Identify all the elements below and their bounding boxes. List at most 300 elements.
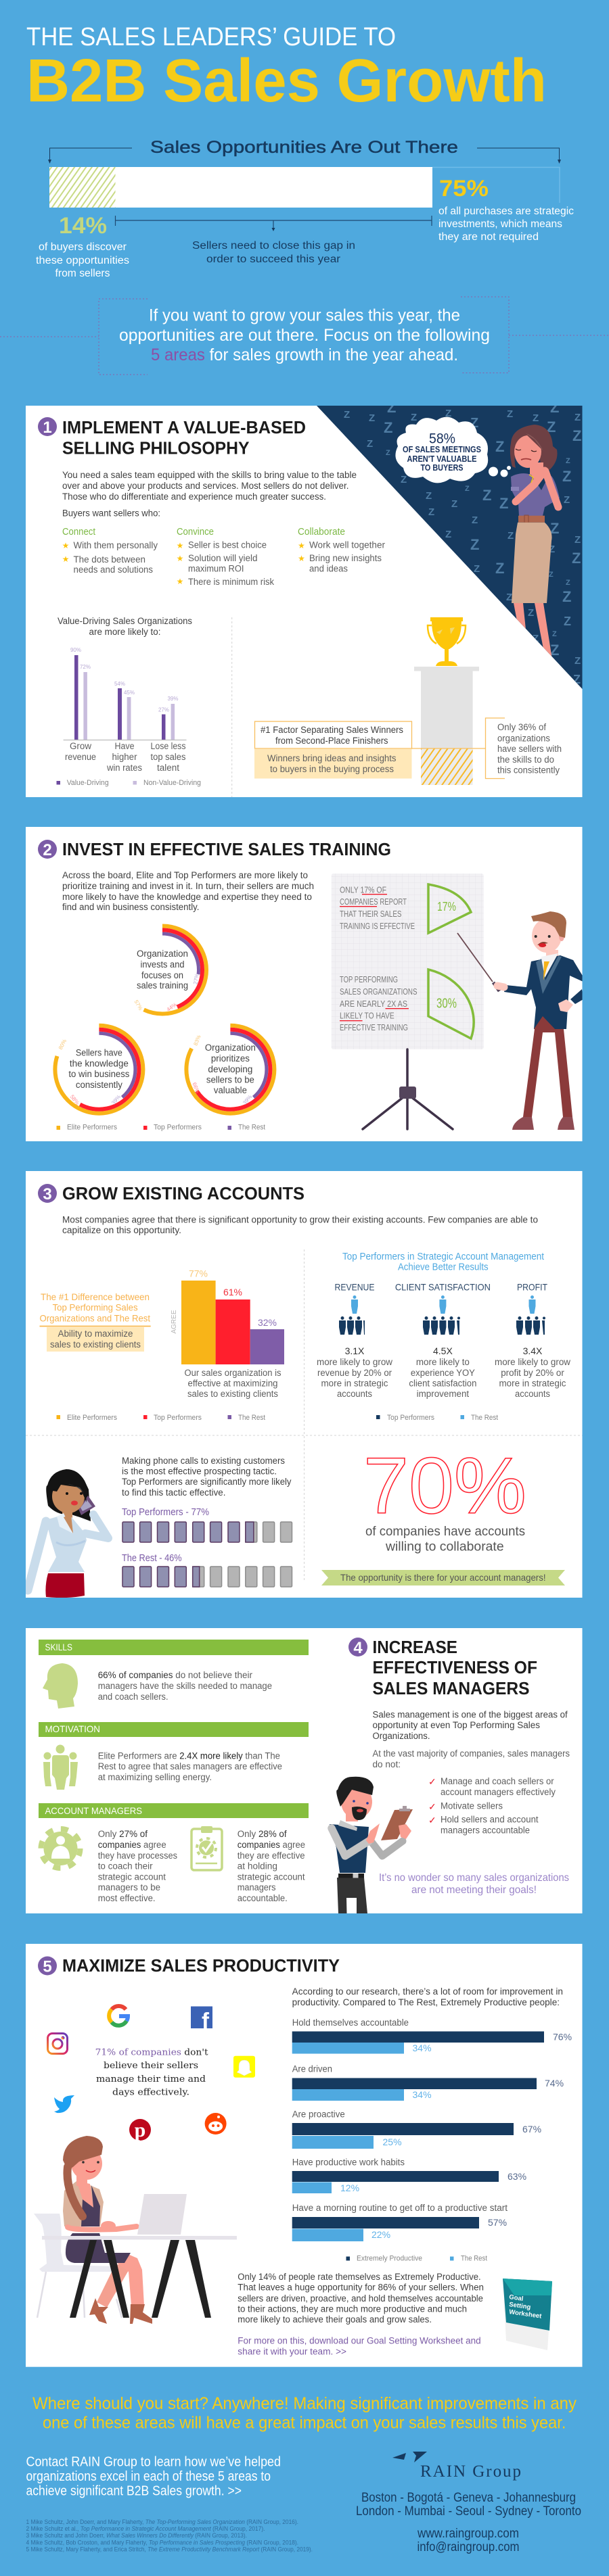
callout: number one factor: to buyers in the buying process	[270, 764, 394, 774]
z pattern: Z	[550, 520, 559, 537]
z pattern: Z	[472, 515, 478, 526]
column: client satisfaction	[395, 1282, 491, 1399]
text: contact details: info@raingroup.com	[417, 2540, 520, 2554]
list: managers do not: ✓	[428, 1815, 436, 1826]
z pattern: Z	[566, 579, 570, 587]
chart: sellers knowledge donut: 80%	[58, 1039, 68, 1051]
column: profit: more in strategic	[499, 1378, 566, 1389]
text: contact rain group	[26, 2454, 281, 2499]
icon: twitter	[54, 2095, 74, 2113]
callout: number one factor	[254, 721, 411, 779]
callout: only 36 percent: Only 36% of	[497, 722, 546, 732]
text: sales management intro: Organizations.	[372, 1731, 430, 1741]
text: intro: prioritize training and invest in it. In turn, their sellers are much	[62, 881, 314, 891]
callout: 58 percent thought bubble	[395, 417, 511, 483]
callout: only 36 percent	[411, 718, 562, 779]
callout: number one factor: Winners bring ideas and insights	[267, 753, 397, 763]
text: only 17 percent	[340, 884, 415, 931]
chart: prioritizes developing donut: Organization	[205, 1043, 256, 1053]
icon: presenter	[457, 911, 583, 1130]
z pattern: Z	[550, 642, 559, 659]
callout: number one factor: #1 Factor Separating Sales Winners	[261, 725, 403, 735]
text: 28 percent: accountable.	[238, 1893, 288, 1903]
logo: rain group	[392, 2452, 521, 2481]
callout: 71 percent of companies	[95, 2047, 208, 2097]
text: 75 percent caption	[438, 206, 574, 243]
icon: clipboard	[191, 1826, 222, 1870]
chart: value-driving bars: higher	[112, 752, 137, 762]
z pattern: Z	[562, 588, 571, 605]
legend: performers: The Rest	[238, 1124, 265, 1132]
callout: where should you start: one of these areas will have a great impact on your sales results this year.	[43, 2414, 566, 2433]
text: intro: You need a sales team equipped with the skills to bring value to the table	[62, 470, 357, 480]
chart: morning routine bars	[292, 2203, 508, 2241]
text: only 17 percent: ONLY 17% OF	[340, 884, 386, 895]
chart: organization invests donut: Organization	[137, 949, 188, 959]
chart: maximizing sales bars: 77%	[189, 1268, 208, 1279]
chart: value-driving bars: revenue	[65, 752, 96, 762]
text: top performing: ARE NEARLY 2X AS	[340, 999, 407, 1009]
text: top performing: SALES ORGANIZATIONS	[340, 986, 418, 997]
chart: accountable bars: 76%	[553, 2031, 572, 2042]
text: only 17 percent: COMPANIES REPORT	[340, 897, 407, 907]
chart: maximizing sales bars: effective at maximizing	[188, 1378, 277, 1389]
icon: facebook: f	[202, 2008, 210, 2033]
callout: 71 percent of companies: 71% of companies don't	[95, 2047, 208, 2058]
dark sleepy triangle	[317, 406, 582, 689]
text: intro: over and above your products and services. Most sellers do not deliver.	[62, 481, 349, 491]
z pattern: Z	[552, 630, 557, 638]
list: managers do not: managers accountable	[441, 1826, 530, 1835]
link: goal setting worksheet: share it with your team. >>	[238, 2346, 346, 2357]
heading: section 5: MAXIMIZE SALES PRODUCTIVITY	[62, 1955, 340, 1976]
icon: worksheet book: Worksheet	[509, 2308, 543, 2320]
z pattern: Z	[387, 399, 396, 416]
heading: sales opportunities: Sales Opportunities Are Out There	[150, 138, 458, 157]
icon: number 5	[38, 1957, 57, 1976]
list: collaborate: ★	[298, 554, 305, 563]
callout: only 36 percent: the skills to do	[497, 755, 554, 765]
chart: maximizing sales bars: 61%	[223, 1287, 242, 1297]
chart: top performers phones 77 percent: Top Performers - 77%	[122, 1507, 209, 1518]
chart: 17 percent sector: 17%	[437, 900, 456, 913]
list: collaborate: Work well together	[309, 540, 386, 550]
icon: woman on phone	[28, 1469, 108, 1598]
z pattern: Z	[506, 592, 512, 603]
chart: proactive bars: Are proactive	[292, 2109, 345, 2119]
chart: sellers knowledge donut: the knowledge	[70, 1059, 129, 1068]
text: close the gap: order to succeed this year	[206, 254, 340, 265]
text: productivity intro: According to our research, there’s a lot of room for improvement in	[292, 1986, 563, 1997]
chart: maximizing sales bars: sales to existing clients	[187, 1389, 278, 1399]
column: revenue: more in strategic	[321, 1378, 388, 1389]
chart: sellers knowledge donut: 58%	[69, 1094, 81, 1106]
text: 27 percent: Only 27% of	[98, 1829, 148, 1839]
z pattern: Z	[562, 468, 571, 485]
list: managers do not: Manage and coach sellers or	[441, 1776, 554, 1786]
list: collaborate	[298, 527, 386, 573]
text: office locations	[356, 2491, 581, 2519]
legend: extremely productive: The Rest	[461, 2254, 487, 2262]
arrow: gap bracket	[115, 216, 432, 231]
text: intro	[62, 470, 357, 518]
chart: value-driving bars: Have	[115, 741, 134, 751]
legend: extremely productive: Extremely Productive	[357, 2254, 422, 2262]
text: office locations: London - Mumbai - Seoul - Sydney - Toronto	[356, 2504, 581, 2519]
chart: sellers knowledge donut: Sellers have	[76, 1048, 122, 1057]
list: connect: needs and solutions	[73, 565, 153, 575]
heading: section 4: SALES MANAGERS	[372, 1678, 529, 1698]
z pattern	[344, 399, 581, 686]
legend: performers: Elite Performers	[67, 1414, 117, 1422]
icon: trophy	[428, 617, 466, 666]
z pattern: Z	[533, 633, 539, 644]
text: 28 percent: they are effective	[238, 1851, 305, 1861]
z pattern: Z	[573, 673, 581, 686]
chart: organization invests donut: focuses on	[141, 970, 183, 980]
list: connect: ★	[62, 554, 69, 564]
panel: 1 value-based selling	[26, 399, 582, 797]
z pattern: Z	[574, 412, 581, 423]
chart: sellers knowledge donut: to win business	[68, 1069, 130, 1079]
callout: number one difference: Top Performing Sales	[53, 1302, 138, 1313]
chart: value-driving bars: are more likely to:	[89, 627, 161, 637]
chart: organization invests donut: 44%	[166, 1001, 178, 1013]
list: collaborate: Collaborate	[298, 527, 345, 538]
icon: worksheet book: Setting	[509, 2301, 531, 2311]
z pattern: Z	[474, 563, 480, 575]
chart: prioritizes developing donut: 66%	[191, 1082, 200, 1094]
column: client satisfaction: more likely to	[416, 1357, 470, 1367]
z pattern: Z	[564, 615, 571, 628]
z pattern: Z	[549, 544, 555, 555]
z pattern: Z	[499, 495, 508, 512]
chart: work habits bars: 12%	[340, 2183, 359, 2193]
z pattern: Z	[386, 449, 390, 457]
text: intro: Those who do differentiate and experience much greater success.	[62, 492, 326, 502]
heading: strategic account management: Top Performers in Strategic Account Management	[342, 1251, 544, 1262]
list: managers do not: account managers effectively	[441, 1787, 556, 1797]
chart: organization invests donut: 27%	[192, 973, 200, 985]
legend: performers	[57, 1414, 265, 1422]
text: sales management intro: do not:	[372, 1759, 401, 1769]
panel: 5 sales productivity	[26, 1944, 582, 2367]
panel: sales opportunities gap	[36, 138, 574, 279]
text: intro	[62, 1214, 538, 1235]
text: contact rain group: Contact RAIN Group to learn how we’ve helped	[26, 2454, 281, 2469]
z pattern: Z	[445, 529, 451, 540]
chart: the rest phones 46 percent	[122, 1553, 292, 1587]
heading: section 1	[62, 417, 306, 458]
text: sales management intro: Sales management is one of the biggest areas of	[372, 1709, 568, 1720]
text: 75 percent caption: of all purchases are strategic	[438, 206, 574, 217]
text: office locations: Boston - Bogotá - Geneva - Johannesburg	[361, 2491, 576, 2505]
callout: where should you start	[32, 2394, 577, 2433]
list: connect: Connect	[62, 527, 95, 538]
section: skills	[39, 1640, 309, 1709]
text: productivity intro	[292, 1986, 563, 2007]
list: managers do not: Hold sellers and account	[441, 1815, 539, 1824]
title: THE SALES LEADERS’ GUIDE TO	[26, 23, 396, 51]
chart: work habits bars: Have productive work habits	[292, 2157, 405, 2168]
text: phone calls	[122, 1456, 292, 1498]
legend: performers	[57, 1124, 265, 1132]
text: only 17 percent: TRAINING IS EFFECTIVE	[340, 921, 415, 931]
text: top performing: LIKELY TO HAVE	[340, 1010, 394, 1021]
heading: section 4	[372, 1637, 537, 1698]
chart: maximizing sales bars: Our sales organization is	[184, 1368, 281, 1378]
text: footnotes: 4 Mike Schultz, Bob Croston, and Mary Flaherty, Top Performance in Sales Prospecting (RAIN Group, 2018).	[26, 2539, 298, 2546]
callout: 58 percent thought bubble: 58%	[429, 431, 455, 446]
list: convince: ★	[177, 554, 183, 563]
column: client satisfaction: experience YOY	[411, 1368, 475, 1378]
column: revenue: 3.1X	[345, 1345, 365, 1356]
chart: organization invests donut: sales training	[137, 980, 188, 991]
logo: rain group: RAIN Group	[420, 2462, 521, 2481]
text: sales management intro	[372, 1709, 570, 1769]
z pattern: Z	[572, 427, 581, 444]
stat: 70 percent: 70%	[363, 1441, 526, 1531]
chart: sellers knowledge donut	[55, 1026, 143, 1114]
chart: value-driving bars: 39%	[167, 696, 179, 702]
section: skills: SKILLS	[45, 1642, 72, 1652]
list: connect	[62, 527, 158, 575]
chart: value-driving bars: Value-Driving	[67, 779, 109, 787]
arrow: left bracket	[48, 148, 132, 164]
heading: section 1: SELLING PHILOSOPHY	[62, 438, 249, 458]
chart: prioritizes developing donut: sellers to be	[206, 1075, 254, 1084]
bar: 75 percent outline	[432, 168, 560, 203]
chart: work habits bars	[292, 2157, 526, 2193]
panel: 4 sales managers	[26, 1628, 582, 1913]
chart: value-driving bars: 90%	[70, 647, 81, 653]
list: connect: The dots between	[73, 554, 145, 565]
callout: ribbon	[321, 1570, 565, 1585]
icon: number 3	[38, 1184, 57, 1203]
stat: 75 percent: 75%	[439, 176, 489, 201]
z pattern: Z	[507, 408, 513, 420]
chart: accountable bars: 34%	[413, 2043, 432, 2053]
z pattern: Z	[367, 438, 373, 450]
z pattern: Z	[465, 485, 470, 493]
icon: worksheet book: Goal	[509, 2293, 524, 2303]
list: managers do not: ✓	[428, 1801, 436, 1812]
text: 75 percent caption: they are not required	[438, 231, 539, 243]
text: 28 percent: Only 28% of	[238, 1829, 287, 1839]
text: intro: find and win business consistently.	[62, 902, 199, 912]
column: profit: 3.4X	[523, 1345, 543, 1356]
chart: value-driving bars: 54%	[114, 681, 125, 687]
text: footnotes	[26, 2519, 313, 2553]
text: contact details	[417, 2527, 520, 2554]
legend: top performers and the rest: The Rest	[471, 1414, 498, 1422]
chart: prioritizes developing donut: 39%	[242, 1094, 253, 1106]
heading: section 4: INCREASE	[372, 1637, 457, 1657]
list: collaborate: and ideas	[309, 564, 348, 573]
section: motivation: MOTIVATION	[45, 1723, 100, 1734]
z pattern: Z	[451, 498, 457, 510]
chart: morning routine bars: Have a morning routine to get off to a productive start	[292, 2203, 508, 2213]
text: 27 percent: companies agree	[98, 1840, 166, 1850]
link: goal setting worksheet	[238, 2335, 481, 2357]
icon: woman at laptop	[34, 2136, 237, 2324]
text: 28 percent: managers	[238, 1882, 276, 1892]
chart: value-driving bars: 45%	[124, 690, 135, 696]
text: 70 percent caption	[365, 1525, 525, 1554]
chart: the rest phones 46 percent: The Rest - 46%	[122, 1553, 182, 1564]
text: contact rain group: organizations excel in each of these 5 areas to	[26, 2469, 271, 2484]
z pattern: Z	[401, 474, 407, 485]
chart: sellers knowledge donut: 39%	[110, 1094, 122, 1106]
section: account managers	[39, 1803, 309, 1903]
icon: number 1: 1	[43, 419, 52, 437]
z pattern: Z	[411, 412, 417, 423]
text: motivation: Rest to agree that sales managers are effective	[98, 1761, 282, 1771]
text: footnotes: 1 Mike Schultz, John Doerr, and Mary Flaherty, The Top-Performing Sales Organization (RAIN Group, 2016).	[26, 2519, 298, 2526]
text: intro: Across the board, Elite and Top Performers are more likely to	[62, 870, 308, 880]
icon: number 2: 2	[43, 841, 52, 859]
column: profit: PROFIT	[517, 1282, 547, 1293]
z pattern: Z	[564, 494, 570, 506]
text: contact details: www.raingroup.com	[417, 2527, 519, 2541]
text: footnotes: 2 Mike Schultz et al., Top Performance in Strategic Account Management (RAIN Group, 2017).	[26, 2525, 265, 2533]
column: profit: accounts	[515, 1389, 550, 1399]
text: 14 percent caption: from sellers	[55, 268, 110, 279]
text: footnotes: 3 Mike Schultz and John Doerr, What Sales Winners Do Differently (RAIN Group, 2013).	[26, 2532, 247, 2539]
icon: manager with clipboard	[330, 1777, 413, 1913]
text: 28 percent	[238, 1829, 305, 1903]
panel: 3 grow existing accounts	[26, 1171, 582, 1598]
column: client satisfaction: improvement	[417, 1389, 469, 1399]
legend: top performers and the rest: Top Performers	[387, 1414, 434, 1422]
z pattern: Z	[550, 399, 559, 416]
link: goal setting worksheet: For more on this, download our Goal Setting Worksheet and	[238, 2335, 481, 2346]
chart: top performers phones 77 percent	[122, 1507, 292, 1542]
chart: proactive bars: 67%	[522, 2124, 541, 2134]
text: sales management intro: opportunity at even Top Performing Sales	[372, 1720, 540, 1730]
text: only 14 percent: Only 14% of people rate themselves as Extremely Productive.	[238, 2272, 481, 2282]
chart: value-driving bars: Grow	[70, 741, 91, 751]
text: 28 percent: at holding	[238, 1861, 277, 1871]
chart: value-driving bars: Lose less	[150, 741, 186, 751]
z pattern: Z	[369, 412, 375, 424]
section: account managers: ACCOUNT MANAGERS	[45, 1805, 142, 1816]
text: 14 percent caption: these opportunities	[36, 255, 129, 266]
list: collaborate: ★	[298, 541, 305, 550]
callout: number one difference: sales to existing clients	[50, 1339, 141, 1350]
text: only 14 percent: That leaves a huge opportunity for 86% of your sellers. When	[238, 2283, 484, 2292]
chart: driven bars: Are driven	[292, 2064, 332, 2074]
list: collaborate: Bring new insights	[309, 553, 382, 563]
chart: value-driving bars: 27%	[158, 707, 169, 713]
text: motivation	[98, 1751, 282, 1782]
callout: focus on 5 areas: 5 areas for sales growth in the year ahead.	[151, 345, 458, 364]
chart: value-driving bars: Non-Value-Driving	[143, 779, 201, 787]
z pattern: Z	[566, 457, 570, 465]
callout: focus on 5 areas: opportunities are out there. Focus on the following	[119, 326, 490, 345]
bar: white opportunity gap	[49, 167, 432, 208]
callout: 58 percent thought bubble: TO BUYERS	[421, 463, 463, 473]
text: 75 percent caption: investments, which means	[438, 218, 562, 230]
column: profit: profit by 20% or	[501, 1368, 564, 1378]
text: intro: Buyers want sellers who:	[62, 508, 160, 518]
legend: performers: The Rest	[238, 1414, 265, 1422]
callout: number one factor: from Second-Place Finishers	[275, 736, 388, 746]
chart: maximizing sales bars: 32%	[258, 1317, 277, 1328]
icon: pinterest: p	[135, 2119, 145, 2141]
callout: number one difference: The #1 Difference between	[41, 1291, 150, 1302]
chart: accountable bars: Hold themselves accountable	[292, 2018, 409, 2028]
text: sales management intro: At the vast majority of companies, sales managers	[372, 1748, 570, 1759]
z pattern: Z	[470, 416, 478, 431]
text: 14 percent caption: of buyers discover	[39, 241, 127, 253]
callout: 58 percent thought bubble: AREN'T VALUABLE	[407, 454, 476, 464]
text: skills: and coach sellers.	[98, 1692, 168, 1702]
legend: performers: Top Performers	[154, 1124, 202, 1132]
chart: maximizing sales bars	[171, 1268, 284, 1399]
callout: 71 percent of companies: manage their time and	[96, 2074, 206, 2084]
heading: section 2: INVEST IN EFFECTIVE SALES TRAINING	[62, 839, 391, 859]
chart: value-driving bars: 72%	[80, 664, 91, 670]
callout: number one difference	[39, 1291, 151, 1352]
callout: focus on 5 areas: If you want to grow your sales this year, the	[149, 306, 460, 325]
z pattern: Z	[445, 408, 451, 419]
text: 28 percent: companies agree	[238, 1840, 305, 1850]
text: productivity intro: productivity. Compared to The Rest, Extremely Productive people:	[292, 1997, 560, 2007]
text: top performing	[340, 974, 418, 1032]
column: client satisfaction: CLIENT SATISFACTION	[395, 1282, 491, 1293]
chart: prioritizes developing donut: developing	[208, 1064, 252, 1074]
callout: no wonder	[379, 1872, 569, 1896]
icon: number 1	[38, 417, 57, 437]
chart: work habits bars: 63%	[508, 2171, 526, 2182]
column: profit	[495, 1282, 570, 1399]
z pattern: Z	[574, 655, 581, 667]
z pattern: Z	[574, 534, 581, 546]
callout: number one difference: Organizations and The Rest	[39, 1313, 150, 1324]
chart: 30 percent sector	[428, 970, 474, 1039]
z pattern: Z	[344, 409, 350, 421]
column: client satisfaction: 4.5X	[433, 1345, 453, 1356]
icon: worksheet book	[503, 2279, 552, 2350]
legend: performers: Top Performers	[154, 1414, 202, 1422]
text: skills	[98, 1670, 272, 1702]
heading: strategic account management	[342, 1251, 544, 1272]
list: connect: ★	[62, 541, 69, 550]
z pattern: Z	[549, 571, 554, 579]
text: phone calls: is the most effective prospecting tactic.	[122, 1466, 277, 1477]
chart: organization invests donut	[118, 926, 206, 1014]
text: phone calls: Top Performers are significantly more likely	[122, 1477, 292, 1487]
list: managers do not: ✓	[428, 1776, 436, 1787]
chart: 17 percent sector	[428, 884, 471, 933]
icon: number 2	[38, 840, 57, 859]
column: profit: more likely to grow	[495, 1357, 570, 1367]
text: only 14 percent	[238, 2272, 484, 2324]
legend: extremely productive	[346, 2254, 487, 2262]
icon: google	[109, 2006, 128, 2026]
z pattern: Z	[572, 550, 581, 567]
list: convince	[177, 527, 274, 587]
text: 70 percent caption: of companies have accounts	[365, 1525, 525, 1539]
z pattern: Z	[470, 536, 479, 553]
text: motivation: Elite Performers are 2.4X more likely than The	[98, 1751, 280, 1761]
chart: value-driving bars: talent	[157, 763, 179, 773]
heading: section 1: IMPLEMENT A VALUE-BASED	[62, 417, 306, 437]
chart: prioritizes developing donut: 83%	[192, 1034, 202, 1047]
text: skills: managers have the skills needed to manage	[98, 1681, 272, 1691]
z pattern: Z	[426, 490, 432, 502]
